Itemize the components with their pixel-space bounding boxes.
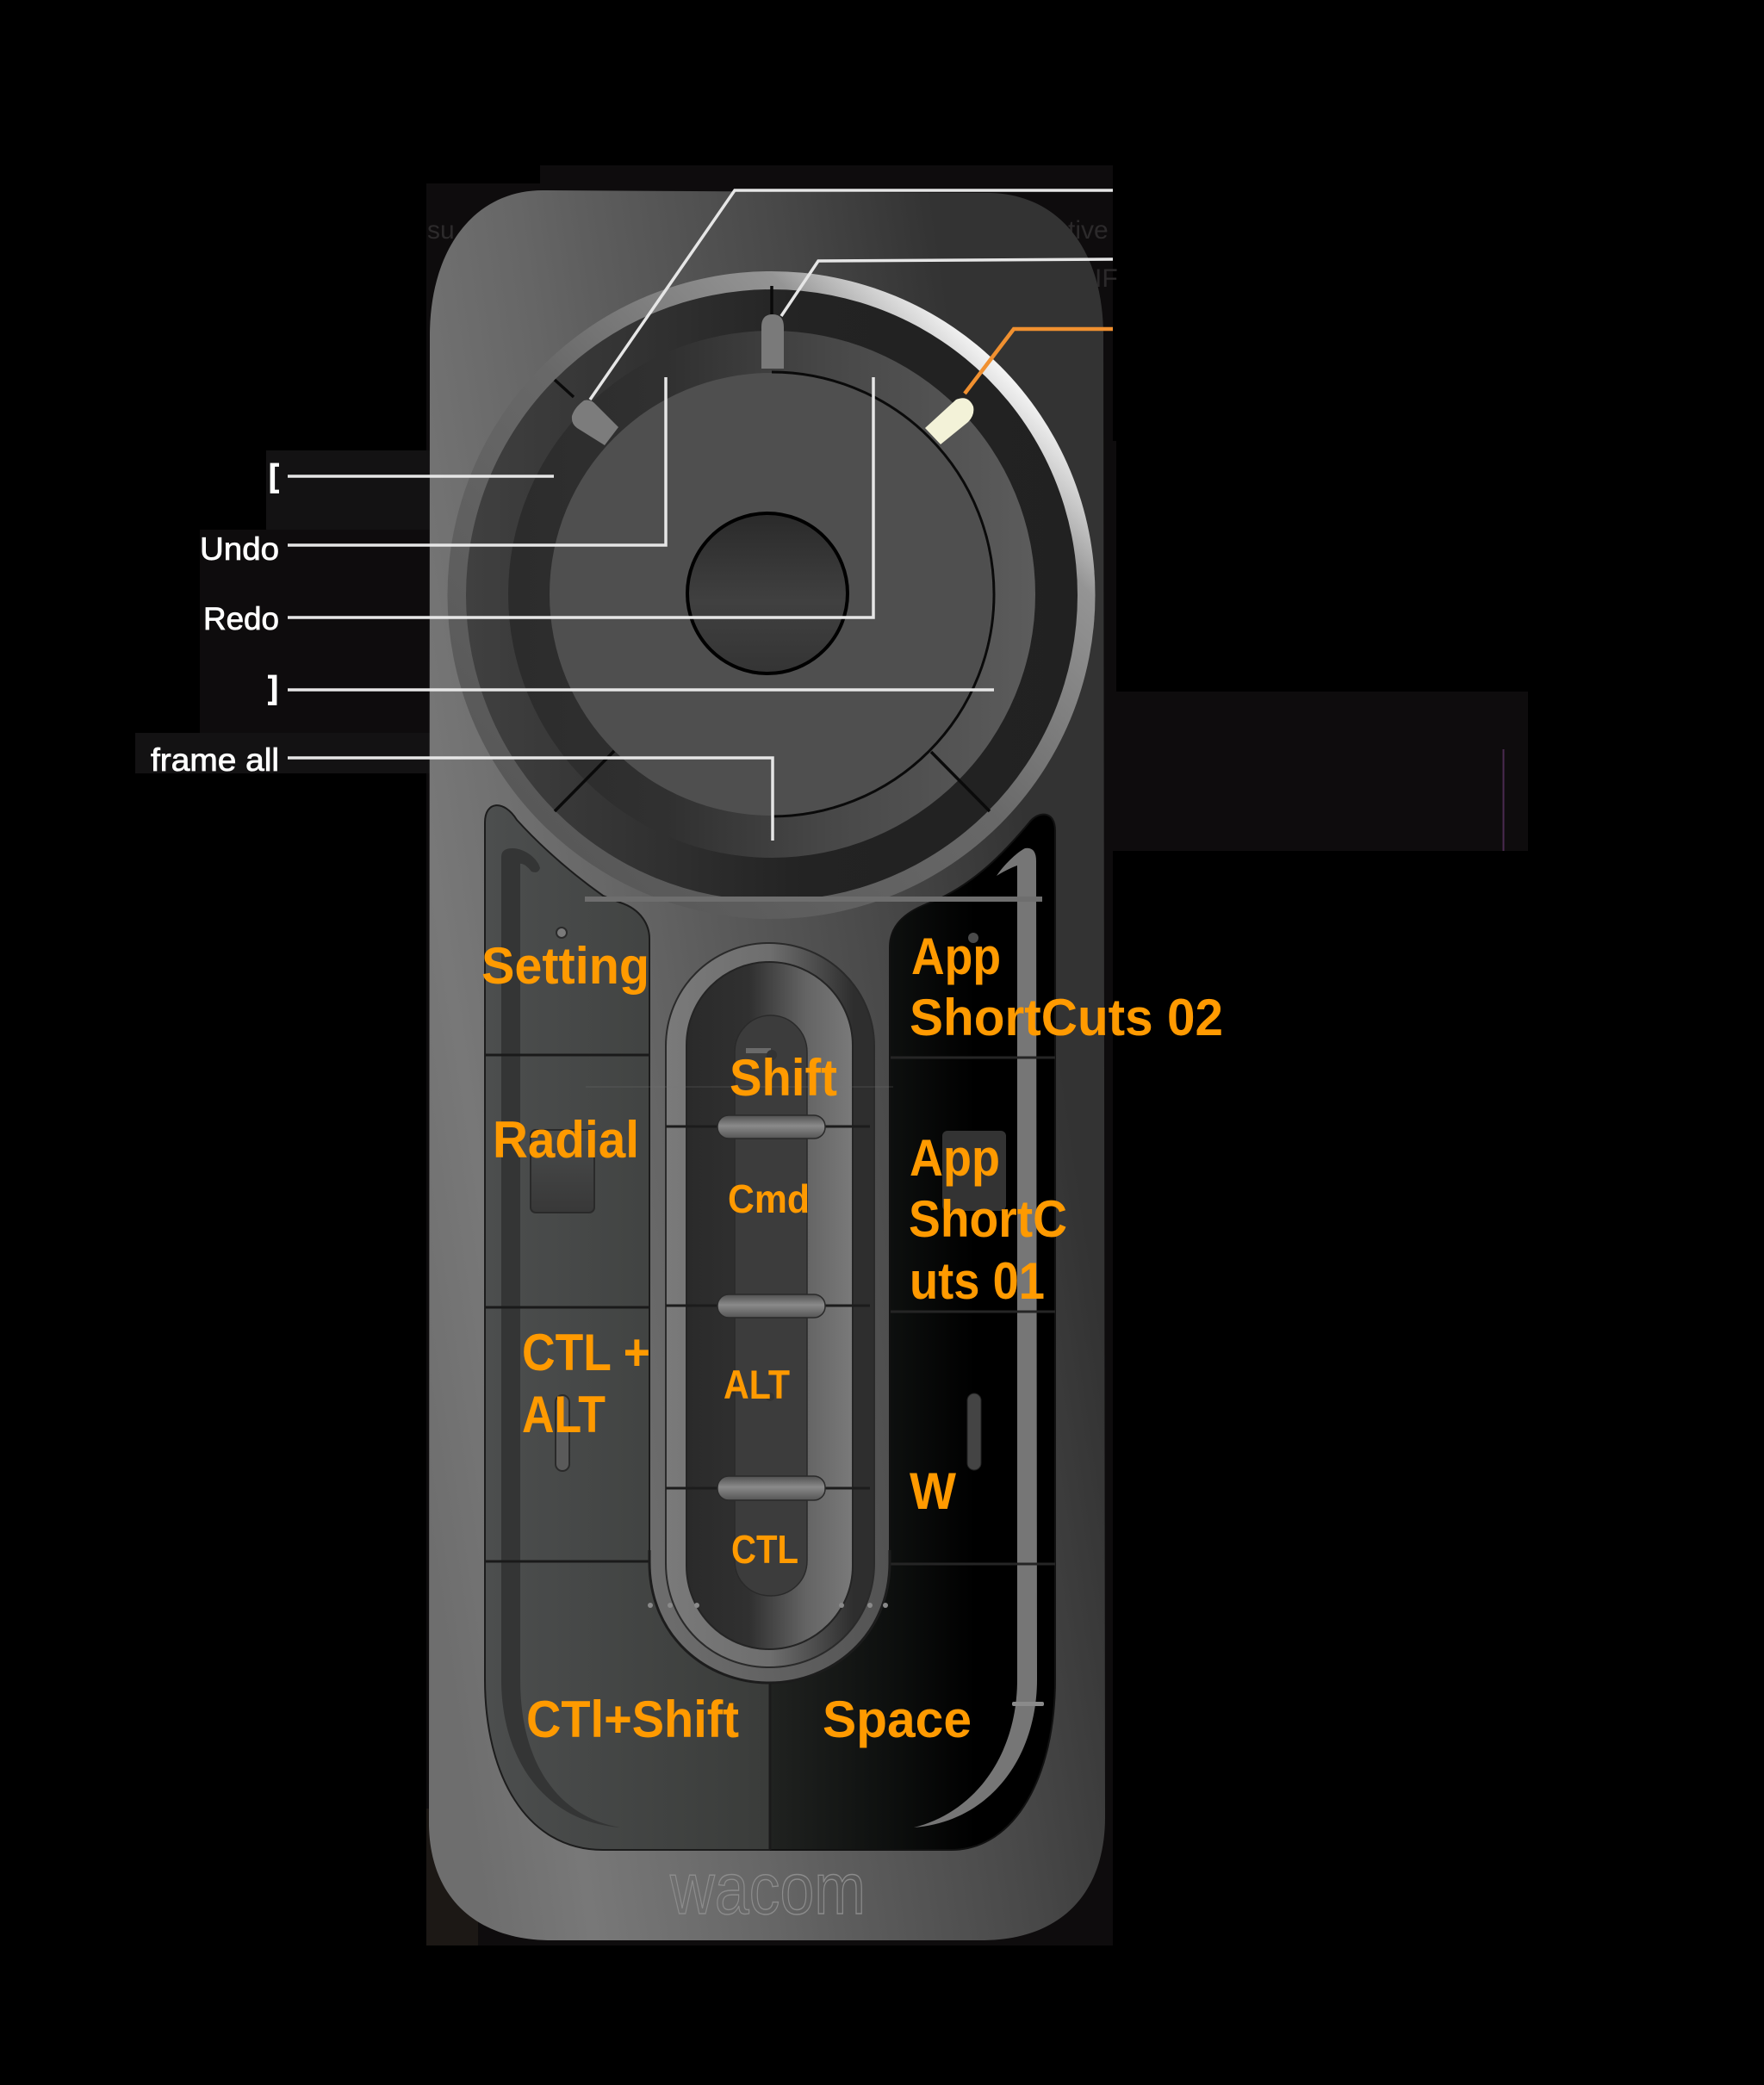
outer light ring xyxy=(448,271,1096,919)
label: CTL: CTL xyxy=(731,1527,798,1572)
key dividers xyxy=(485,1055,1055,1850)
label: ALT: ALT xyxy=(724,1362,790,1407)
leader: Undo xyxy=(288,377,666,545)
capsule outer ring xyxy=(666,943,874,1667)
key panels xyxy=(485,805,1055,1850)
horizontal seam bar xyxy=(585,897,1042,902)
panel: left keys and bottom left xyxy=(484,804,770,1851)
label: Space: Space xyxy=(823,1691,972,1748)
leader: active ring, orange xyxy=(965,329,1113,394)
disk edge arc xyxy=(772,372,994,816)
small capsule marks xyxy=(648,1048,888,1608)
indicator tab active, cream xyxy=(925,398,973,444)
label: frame all: frame all xyxy=(151,742,279,778)
centre button xyxy=(687,513,848,673)
label: ]: ] xyxy=(268,670,278,705)
label: Radial: Radial xyxy=(493,1111,639,1169)
remote body xyxy=(429,190,1105,1940)
leader: ring left xyxy=(590,190,1113,400)
label: CTL + ALT: CTL + xyxy=(522,1324,650,1381)
label: W: W xyxy=(910,1462,956,1520)
modifier pill 2 xyxy=(717,1294,825,1318)
label: Cmd: Cmd xyxy=(728,1176,810,1221)
capsule outline xyxy=(649,1550,890,1683)
infographic canvas xyxy=(135,165,1528,1945)
leader: frame all xyxy=(288,758,773,841)
capsule divider lines xyxy=(666,1126,870,1488)
faint background text remnants: IF xyxy=(1095,264,1118,293)
label: CTL + ALT xyxy=(522,1324,650,1443)
touch disk xyxy=(550,373,992,816)
indicator tab left xyxy=(572,400,618,445)
leader: ring top xyxy=(781,259,1113,316)
label: App ShortCuts 01 xyxy=(909,1129,1067,1310)
faint background text remnants xyxy=(427,216,1118,293)
key indicator: right dot xyxy=(968,933,978,943)
strip nub xyxy=(1012,1702,1044,1706)
wheel labels xyxy=(151,458,279,778)
label: App ShortCuts 01: ShortC xyxy=(909,1190,1067,1248)
background patches xyxy=(135,165,1528,1945)
key bump: right slot xyxy=(967,1393,981,1470)
middle ring xyxy=(508,331,1035,858)
faint background text remnants: tive xyxy=(1068,216,1109,245)
key bump: right square xyxy=(942,1131,1006,1211)
capsule inner well xyxy=(686,962,853,1649)
key labels xyxy=(481,928,1223,1748)
key bump: left slot xyxy=(556,1395,569,1471)
label: CTl+Shift: CTl+Shift xyxy=(526,1691,739,1748)
label: App ShortCuts 01: App xyxy=(910,1129,1000,1187)
leader: Redo xyxy=(288,377,873,617)
right inner strip xyxy=(914,848,1037,1827)
key bump: left square xyxy=(531,1130,594,1213)
label: App ShortCuts 02: ShortCuts 02 xyxy=(910,989,1223,1046)
centre track xyxy=(735,1015,807,1596)
tick marks xyxy=(555,286,990,811)
wacom logo: wacom xyxy=(669,1848,866,1929)
left inner strip xyxy=(501,848,620,1827)
label: Undo: Undo xyxy=(200,531,279,567)
touch wheel xyxy=(448,271,1096,919)
modifier pill 3 xyxy=(717,1476,825,1500)
leader: ] xyxy=(288,688,994,692)
dark outer track xyxy=(466,289,1078,901)
capsule base xyxy=(650,1533,889,1683)
modifier pill 1 xyxy=(717,1115,825,1139)
label: App ShortCuts 01: uts 01 xyxy=(910,1252,1045,1310)
leader: [ xyxy=(288,475,554,478)
label: CTL + ALT: ALT xyxy=(522,1386,606,1443)
centre capsule column xyxy=(648,943,890,1683)
faint background text remnants: su xyxy=(427,216,455,245)
key indicator: left dot xyxy=(556,928,567,938)
label: App ShortCuts 02: App xyxy=(911,928,1001,985)
indicator tab top xyxy=(761,314,784,369)
label: Redo: Redo xyxy=(203,601,279,636)
callout lines xyxy=(288,190,1113,841)
label: App ShortCuts 02 xyxy=(910,928,1223,1046)
panel: right keys and bottom right xyxy=(770,813,1056,1851)
label: Setting: Setting xyxy=(481,937,649,995)
label: [: [ xyxy=(269,458,279,493)
label: Shift: Shift xyxy=(730,1049,837,1107)
